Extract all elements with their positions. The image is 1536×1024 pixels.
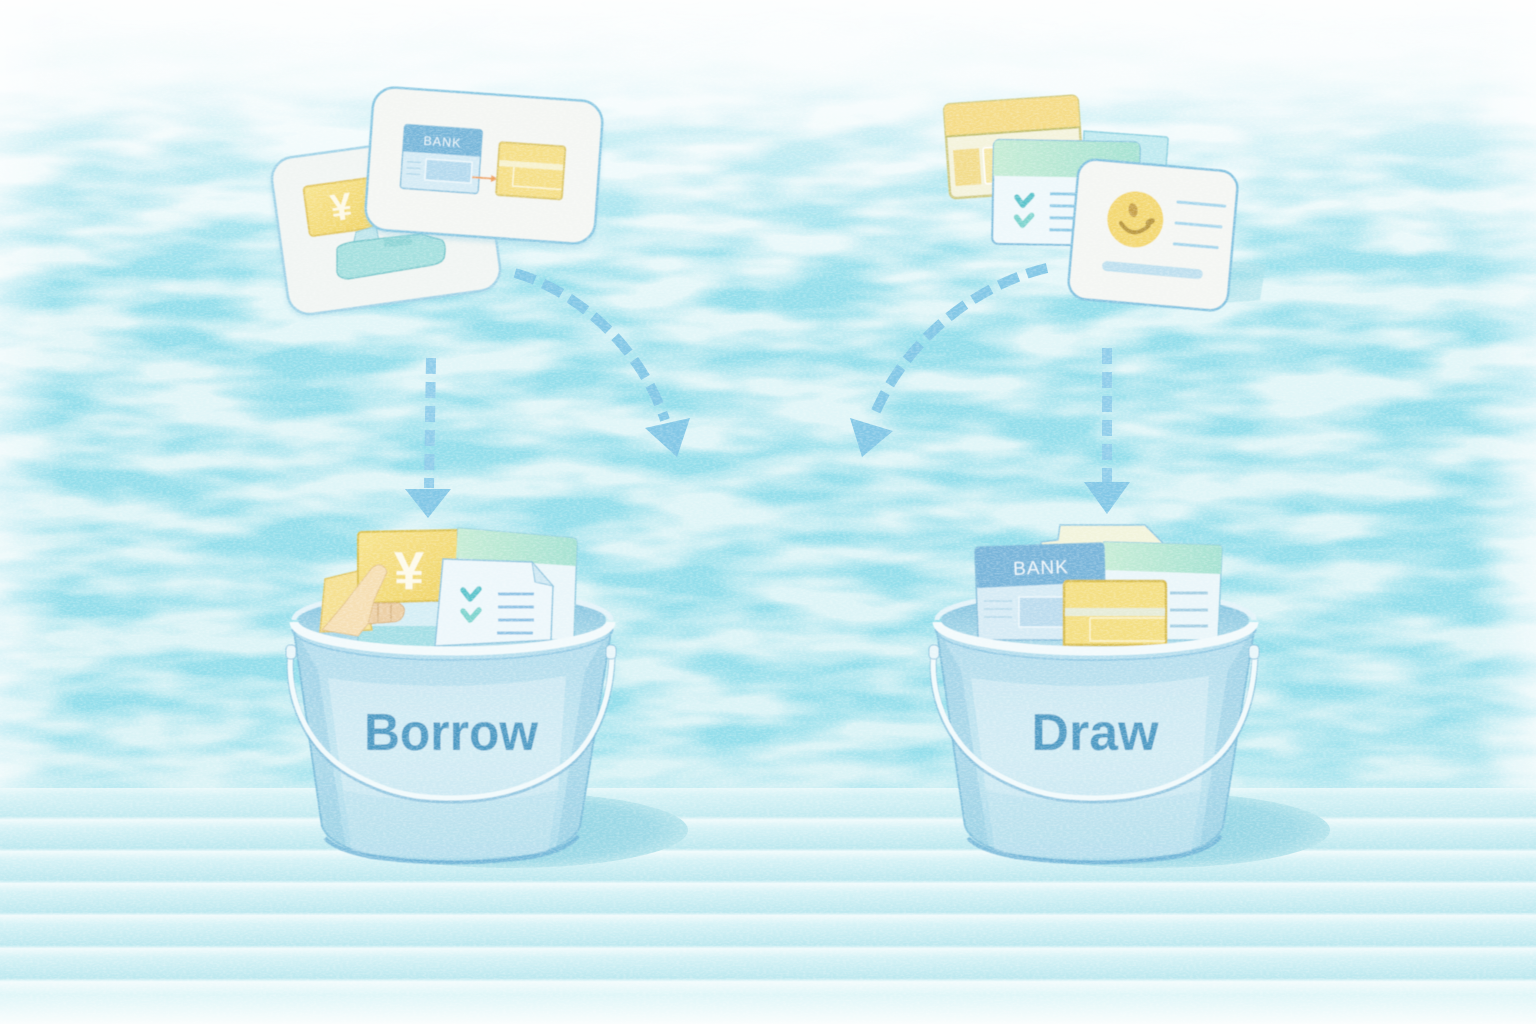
arrow: left curved dashed <box>515 273 690 457</box>
card: bank transfer <box>364 86 605 250</box>
progress bar <box>1102 261 1203 279</box>
background: striped floor <box>0 788 1536 1024</box>
label: Borrow: Borrow <box>364 704 539 762</box>
icon: transfer arrow <box>472 174 498 183</box>
bank document <box>975 543 1106 640</box>
icon: smiley coin <box>1105 189 1166 250</box>
bucket contents: draw <box>975 525 1222 645</box>
yen note <box>358 530 458 603</box>
icon: teal wallet <box>337 226 445 279</box>
icon: hand <box>322 565 404 636</box>
bank document: BANK <box>1013 557 1069 580</box>
yen note: ¥ <box>394 541 424 601</box>
icon: yellow card <box>496 142 565 200</box>
shadow: borrow bucket <box>332 792 688 868</box>
shadow behind profile card <box>1190 258 1266 306</box>
icon: bank document: BANK <box>423 134 462 150</box>
yellow card <box>1064 581 1166 645</box>
card: yellow document <box>944 95 1084 198</box>
bucket: Borrow <box>286 528 616 862</box>
arrow: right straight dashed <box>1084 348 1130 514</box>
bucket: Draw <box>929 525 1259 862</box>
card: checklist <box>992 140 1140 246</box>
left card stack <box>267 86 605 320</box>
bucket contents: borrow <box>320 528 577 647</box>
icon: yen note <box>303 177 381 236</box>
label: Draw: Draw <box>1031 704 1159 762</box>
icon: yen note: ¥ <box>328 186 355 230</box>
card behind hand <box>320 570 372 632</box>
teal box <box>358 625 448 647</box>
background: watercolor sky <box>0 0 1536 798</box>
checklist paper <box>435 559 553 646</box>
card: smiley profile <box>1067 158 1239 312</box>
arrow: left straight dashed <box>405 358 451 518</box>
mint document <box>456 528 577 640</box>
icon: check marks <box>1016 195 1032 225</box>
arrow: right curved dashed <box>850 268 1047 457</box>
card: yen note and wallet <box>267 131 503 320</box>
top paper <box>1041 525 1165 570</box>
card: teal back document <box>1084 131 1168 168</box>
right card stack <box>944 95 1266 312</box>
shadow: draw bucket <box>974 792 1330 868</box>
icon: bank document <box>400 124 482 194</box>
mint document <box>1104 542 1222 640</box>
